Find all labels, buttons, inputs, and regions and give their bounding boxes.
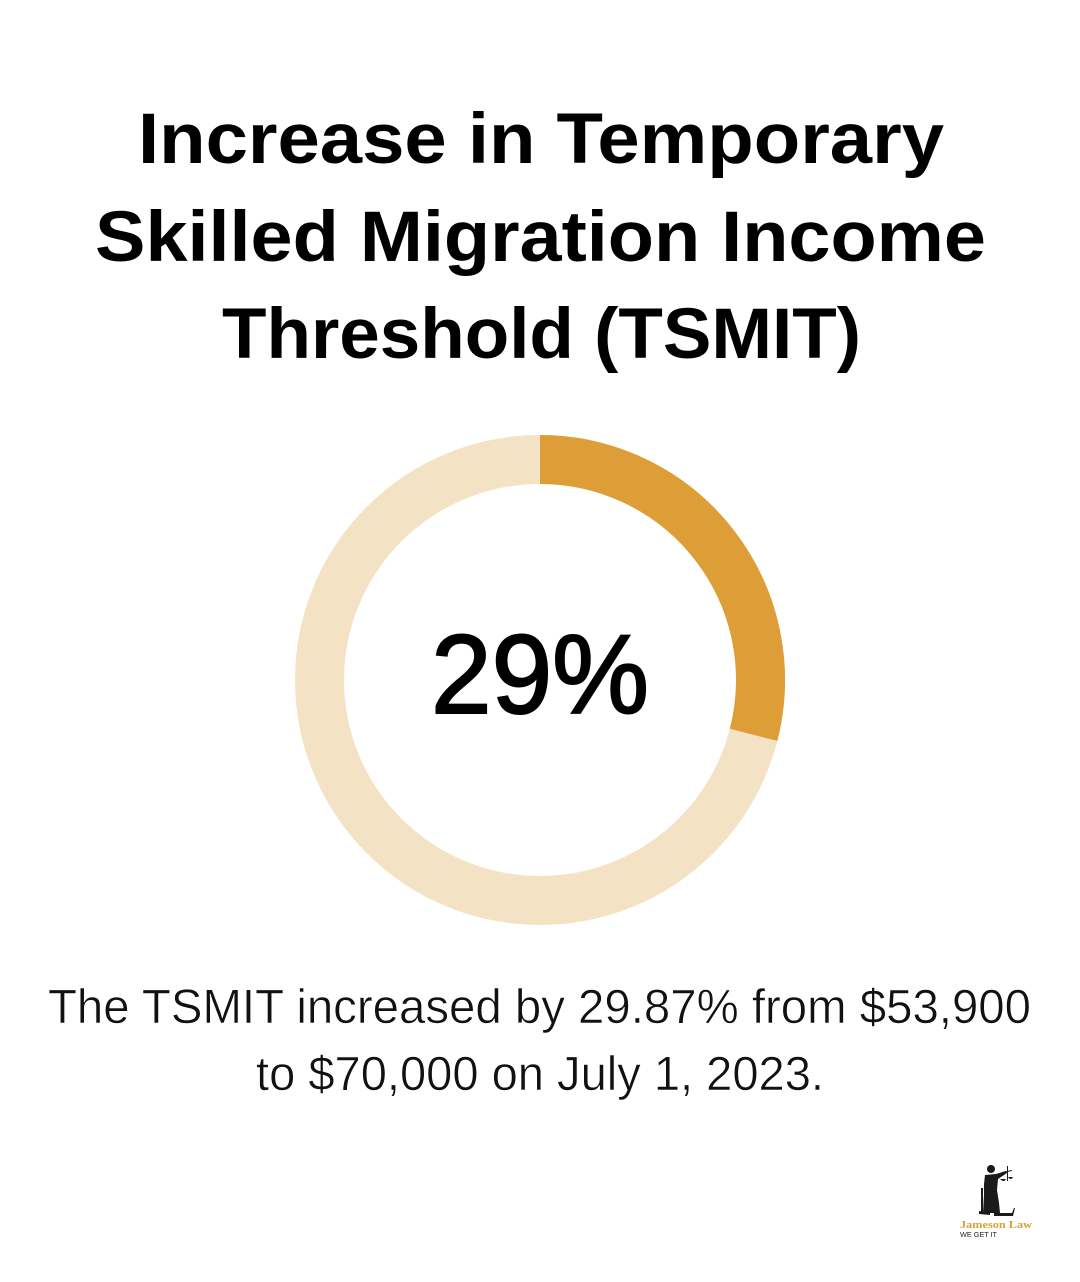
icon: lady justice [979,1165,1015,1216]
logo: Jameson Law [960,1165,1032,1239]
donut value: 29% [431,612,649,737]
title: Threshold (TSMIT) [222,295,861,374]
description text [48,981,1031,1101]
description text: The TSMIT increased by 29.87% from $53,900 [48,981,1031,1034]
title [95,100,986,374]
logo name: Jameson Law [960,1219,1032,1231]
title: Skilled Migration Income [95,198,986,277]
title: Increase in Temporary [138,100,945,179]
donut chart: 29% [320,460,761,900]
logo tagline: WE GET IT [960,1230,997,1239]
description text: to $70,000 on July 1, 2023. [256,1048,824,1101]
